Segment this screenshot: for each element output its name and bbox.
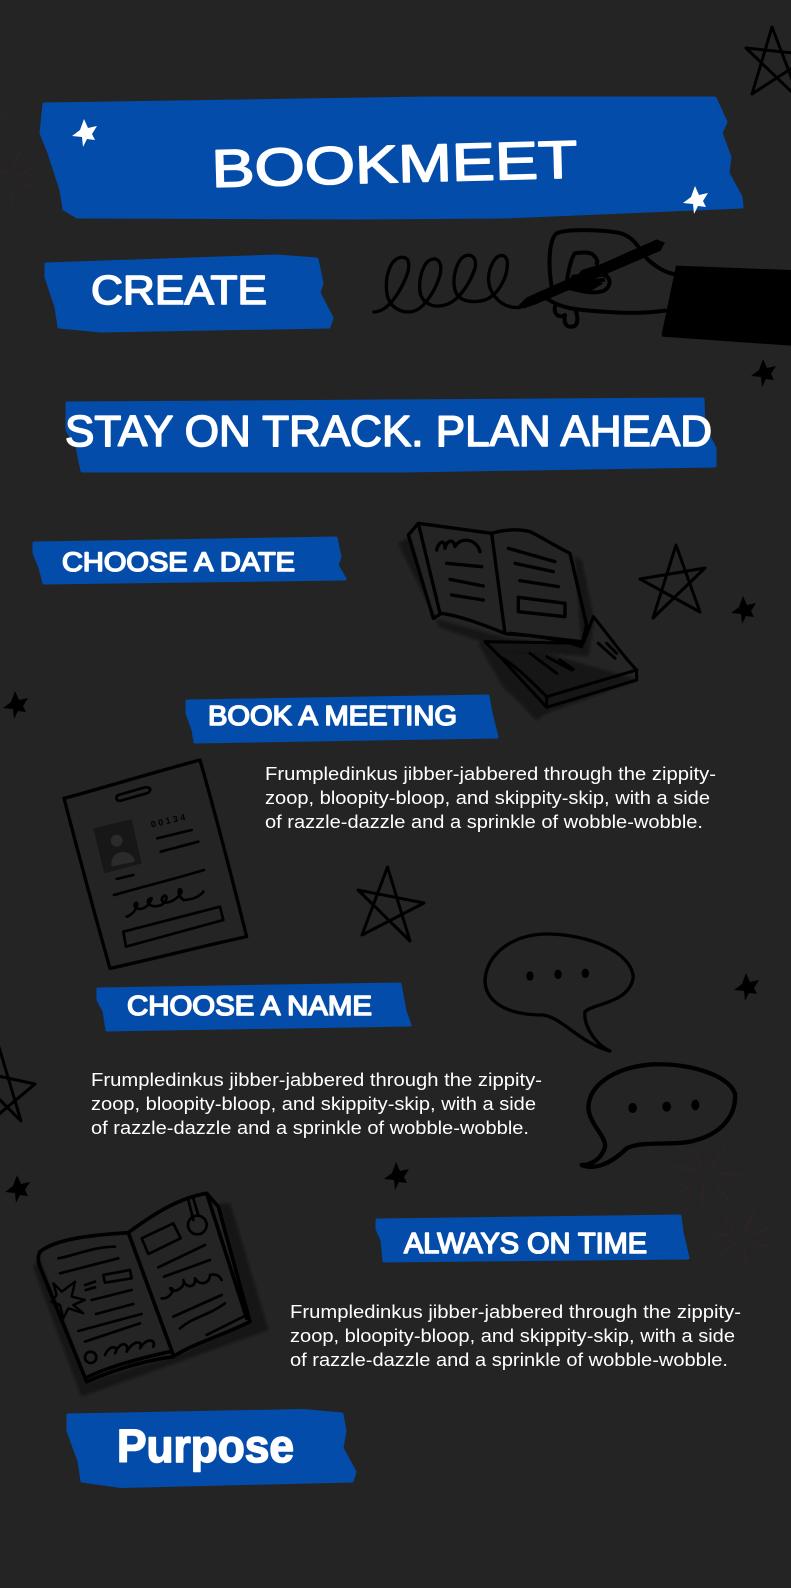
section heading: ALWAYS ON TIME: ALWAYS ON TIME	[404, 1228, 647, 1260]
title banner	[41, 98, 742, 218]
ID number: 00134	[150, 812, 186, 830]
section heading: CREATE	[46, 256, 332, 331]
decoration: outline star	[358, 867, 424, 941]
speech bubble lower	[582, 1064, 735, 1167]
section heading: BOOK A MEETING: BOOK A MEETING	[208, 700, 457, 731]
upper book	[408, 523, 587, 647]
text block: book a meeting description: Frumpledinkus jibber-jabbered through the zippity-	[265, 764, 716, 784]
decoration: small star	[3, 691, 28, 719]
upper book details	[418, 523, 582, 642]
title banner shape	[41, 98, 742, 218]
fingers grip	[567, 263, 608, 292]
text block: choose a name description	[91, 1070, 542, 1138]
section heading: Purpose	[68, 1410, 355, 1486]
photo	[93, 819, 142, 873]
card lines	[114, 830, 223, 947]
section heading: ALWAYS ON TIME	[377, 1216, 688, 1261]
notebook shadow	[33, 1203, 268, 1397]
decoration: small star	[5, 1175, 30, 1203]
illustration: hand writing a scribble	[374, 230, 791, 346]
notebook outline	[38, 1193, 250, 1382]
bookmark	[188, 1198, 207, 1234]
section heading: CHOOSE A NAME	[98, 984, 410, 1030]
card outline	[64, 760, 247, 968]
decoration: small star	[751, 359, 776, 387]
decoration: small star	[734, 973, 759, 1001]
lower book shadow	[478, 640, 638, 720]
burst mark	[52, 1282, 85, 1318]
text block: choose a name description: Frumpledinkus jibber-jabbered through the zippity-	[91, 1070, 542, 1090]
text block: always on time description: zoop, bloopity-bloop, and skippity-skip, with a side	[290, 1326, 735, 1346]
bubble dots lower	[628, 1100, 699, 1113]
circle mark	[85, 1352, 96, 1363]
section heading: CHOOSE A NAME: CHOOSE A NAME	[127, 990, 372, 1021]
speech bubble upper	[485, 934, 633, 1051]
illustration: stacked open books	[398, 523, 638, 720]
illustration: speech bubbles	[485, 934, 735, 1167]
text block: book a meeting description: zoop, bloopity-bloop, and skippity-skip, with a side	[265, 788, 710, 808]
section heading: CHOOSE A DATE	[34, 538, 345, 583]
decoration: outline star	[640, 545, 705, 618]
lanyard slot	[116, 787, 150, 801]
decoration: small star	[731, 596, 756, 624]
scribble line	[374, 255, 520, 312]
decoration: faint bursts right	[675, 1148, 770, 1263]
tagline: STAY ON TRACK. PLAN AHEAD	[65, 407, 712, 456]
text block: book a meeting description	[265, 764, 716, 832]
section heading: CREATE: CREATE	[91, 267, 267, 313]
pen	[518, 239, 665, 309]
portrait	[111, 835, 135, 867]
sleeve	[662, 266, 791, 346]
title: BOOKMEET: BOOKMEET	[211, 130, 578, 199]
section heading: Purpose: Purpose	[117, 1420, 294, 1472]
text block: choose a name description: of razzle-dazzle and a sprinkle of wobble-wobble.	[91, 1118, 529, 1138]
text block: always on time description: Frumpledinkus jibber-jabbered through the zippity-	[290, 1302, 741, 1322]
lower book edge	[500, 643, 637, 707]
decoration: small star	[384, 1162, 409, 1190]
illustration: open notebook	[33, 1193, 268, 1397]
upper book shadow	[398, 537, 594, 656]
decoration: faint burst top left	[0, 113, 35, 205]
decoration: outline star top right	[746, 27, 791, 100]
text block: always on time description	[290, 1302, 741, 1370]
icon: white star right	[683, 186, 708, 214]
section heading: BOOK A MEETING	[187, 696, 497, 742]
text block: choose a name description: zoop, bloopity-bloop, and skippity-skip, with a side	[91, 1094, 536, 1114]
bubble dots upper	[526, 969, 589, 981]
hand outline	[547, 230, 673, 327]
illustration: ID card	[64, 760, 247, 968]
section heading: CHOOSE A DATE: CHOOSE A DATE	[62, 547, 295, 577]
lower book	[485, 617, 637, 697]
text block: always on time description: of razzle-dazzle and a sprinkle of wobble-wobble.	[290, 1350, 728, 1370]
tagline	[65, 399, 715, 471]
icon: white star left	[72, 119, 97, 147]
notebook details	[58, 1223, 243, 1355]
text block: book a meeting description: of razzle-dazzle and a sprinkle of wobble-wobble.	[265, 812, 703, 832]
decoration: outline star left edge	[0, 1047, 35, 1130]
